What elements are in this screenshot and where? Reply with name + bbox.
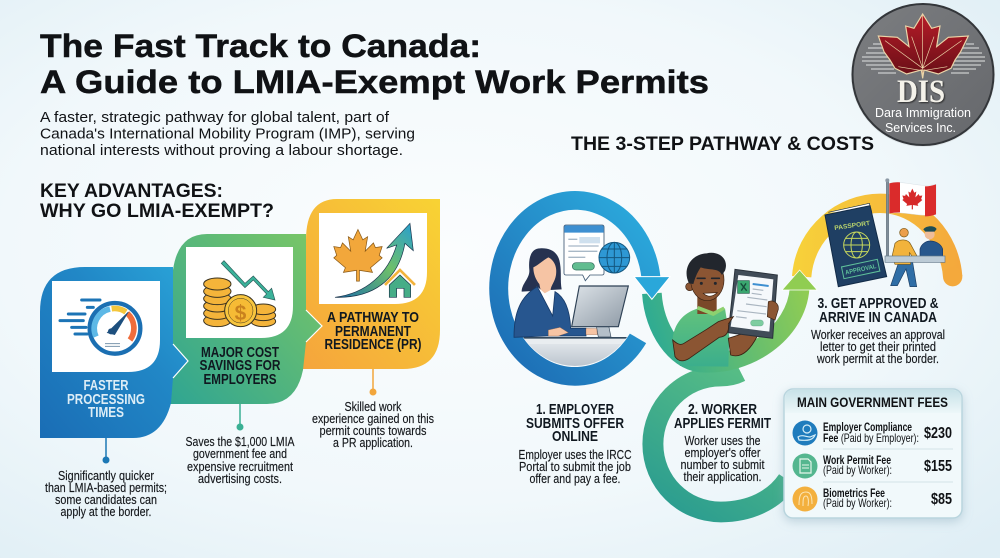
label: faster processing: FASTER xyxy=(84,377,129,394)
step 2 description: employer's offer xyxy=(684,445,761,460)
panel: pathway to PR xyxy=(300,199,440,369)
globe xyxy=(599,242,630,273)
label: pathway: A PATHWAY TO xyxy=(327,309,419,326)
pathway curves xyxy=(499,200,817,512)
yellow arch xyxy=(802,203,962,286)
text: cost savings detail: advertising costs. xyxy=(198,471,282,486)
step 1 heading: SUBMITS OFFER xyxy=(526,415,624,432)
row: work permit fee xyxy=(792,453,952,478)
step 1 description: offer and pay a fee. xyxy=(530,471,620,486)
text: faster processing detail: apply at the border. xyxy=(60,504,152,519)
row: work permit fee: $155 xyxy=(924,458,952,475)
blue ring arrow xyxy=(499,200,670,376)
row: employer compliance fee: Employer Compliance xyxy=(823,420,912,434)
step 1 description xyxy=(518,447,632,486)
step 1 description: Portal to submit the job xyxy=(519,459,631,474)
step 2 description: their application. xyxy=(684,469,762,484)
text: faster processing detail xyxy=(45,468,167,519)
passport xyxy=(825,203,887,287)
text: cost savings detail: government fee and xyxy=(193,446,287,461)
fees heading: MAIN GOVERNMENT FEES xyxy=(797,394,948,410)
green C curve xyxy=(653,372,788,512)
woman xyxy=(514,248,597,337)
row: work permit fee: (Paid by Worker): xyxy=(823,463,892,477)
step 1 heading: 1. EMPLOYER xyxy=(536,401,614,418)
icon: maple leaf with rising arrow and house xyxy=(334,223,415,297)
row: biometrics fee xyxy=(792,486,952,512)
row: work permit fee: Work Permit Fee xyxy=(823,453,891,467)
text: faster processing detail: than LMIA-based permits; xyxy=(45,480,167,495)
row: employer compliance fee xyxy=(792,420,952,446)
text: pathway detail: Skilled work xyxy=(344,399,402,414)
label: cost savings: SAVINGS FOR xyxy=(200,357,281,374)
step 2 heading: APPLIES FERMIT xyxy=(674,415,771,432)
panel: cost savings xyxy=(168,234,322,404)
row: employer compliance fee: $230 xyxy=(924,425,952,442)
connector: faster processing xyxy=(102,438,110,464)
intro text: Canada's International Mobility Program (IMP), serving xyxy=(40,126,415,142)
flag of Canada xyxy=(885,178,936,258)
tablet xyxy=(728,269,777,338)
label: faster processing: PROCESSING xyxy=(67,391,145,408)
heading: key advantages: WHY GO LMIA-EXEMPT? xyxy=(40,201,274,222)
text: pathway detail: a PR application. xyxy=(333,435,413,450)
step 3 heading: ARRIVE IN CANADA xyxy=(819,309,937,326)
label: faster processing xyxy=(67,377,145,421)
step 3 description: Worker receives an approval xyxy=(811,327,945,342)
desk xyxy=(523,337,627,366)
text: cost savings detail xyxy=(186,434,295,486)
logo: Dara Immigration Services: Dara Immigration xyxy=(875,106,971,120)
step 2 description xyxy=(680,433,765,484)
text: cost savings detail: expensive recruitment xyxy=(187,459,293,474)
panel: main government fees xyxy=(784,389,962,518)
step 1 heading xyxy=(526,401,624,445)
step 2 heading: 2. WORKER xyxy=(688,401,757,418)
step 1 heading: ONLINE xyxy=(552,428,598,445)
title xyxy=(40,28,709,100)
traveller xyxy=(891,228,917,287)
text: pathway detail: permit counts towards xyxy=(320,423,427,438)
illustration: arrival at the Canadian border xyxy=(825,178,945,287)
icon: speedometer xyxy=(60,300,140,354)
step 3 description: work permit at the border. xyxy=(816,351,939,366)
row: employer compliance fee: Fee (Paid by Employer): xyxy=(823,431,919,445)
heading: key advantages: KEY ADVANTAGES: xyxy=(40,181,223,202)
step 3 description: letter to get their printed xyxy=(820,339,936,354)
connector: pathway xyxy=(370,369,376,396)
step 3 heading xyxy=(818,295,939,326)
panel: faster processing xyxy=(40,267,188,438)
title: A Guide to LMIA-Exempt Work Permits xyxy=(40,64,709,100)
heading: key advantages xyxy=(40,181,274,222)
row: biometrics fee: $85 xyxy=(931,491,952,508)
title: The Fast Track to Canada: xyxy=(40,28,481,64)
step 3 description xyxy=(811,327,945,366)
label: cost savings xyxy=(200,344,281,388)
intro text xyxy=(40,109,415,159)
label: pathway: RESIDENCE (PR) xyxy=(324,336,422,353)
logo: Dara Immigration Services xyxy=(851,3,995,147)
web form popup xyxy=(564,225,604,281)
illustration: worker with tablet xyxy=(673,253,778,367)
green swoosh arrow xyxy=(652,270,817,363)
passport: APPROVAL xyxy=(845,263,877,277)
logo: Dara Immigration Services: Services Inc. xyxy=(885,121,956,135)
officer xyxy=(920,226,943,257)
label: pathway xyxy=(324,309,422,353)
label: faster processing: TIMES xyxy=(88,404,124,421)
step 3 heading: 3. GET APPROVED & xyxy=(818,295,939,312)
text: pathway detail xyxy=(312,399,434,450)
heading: 3-step pathway: THE 3-STEP PATHWAY & COSTS xyxy=(571,134,874,155)
step 2 heading xyxy=(674,401,771,432)
text: faster processing detail: some candidates can xyxy=(55,492,157,507)
step 1 description: Employer uses the IRCC xyxy=(518,447,632,462)
counter xyxy=(885,256,945,262)
label: pathway: PERMANENT xyxy=(335,323,411,340)
dollar sign: $ xyxy=(235,302,247,325)
row: biometrics fee: (Paid by Worker): xyxy=(823,496,892,510)
row: biometrics fee: Biometrics Fee xyxy=(823,486,885,500)
label: cost savings: EMPLOYERS xyxy=(204,371,276,388)
connector: cost savings xyxy=(236,404,244,430)
text: cost savings detail: Saves the $1,000 LMIA xyxy=(186,434,295,449)
intro text: national interests without proving a labour shortage. xyxy=(40,142,403,159)
icon: coins with falling arrow xyxy=(204,261,276,327)
step 2 description: Worker uses the xyxy=(684,433,760,448)
text: faster processing detail: Significantly quicker xyxy=(58,468,155,483)
passport: PASSPORT xyxy=(834,220,871,232)
label: cost savings: MAJOR COST xyxy=(201,344,279,361)
intro text: A faster, strategic pathway for global talent, part of xyxy=(40,109,390,126)
illustration: employer at computer xyxy=(514,224,630,366)
step 2 description: number to submit xyxy=(680,457,765,472)
monitor xyxy=(572,286,628,337)
logo: Dara Immigration Services: DIS xyxy=(897,74,945,110)
text: pathway detail: experience gained on this xyxy=(312,411,434,426)
